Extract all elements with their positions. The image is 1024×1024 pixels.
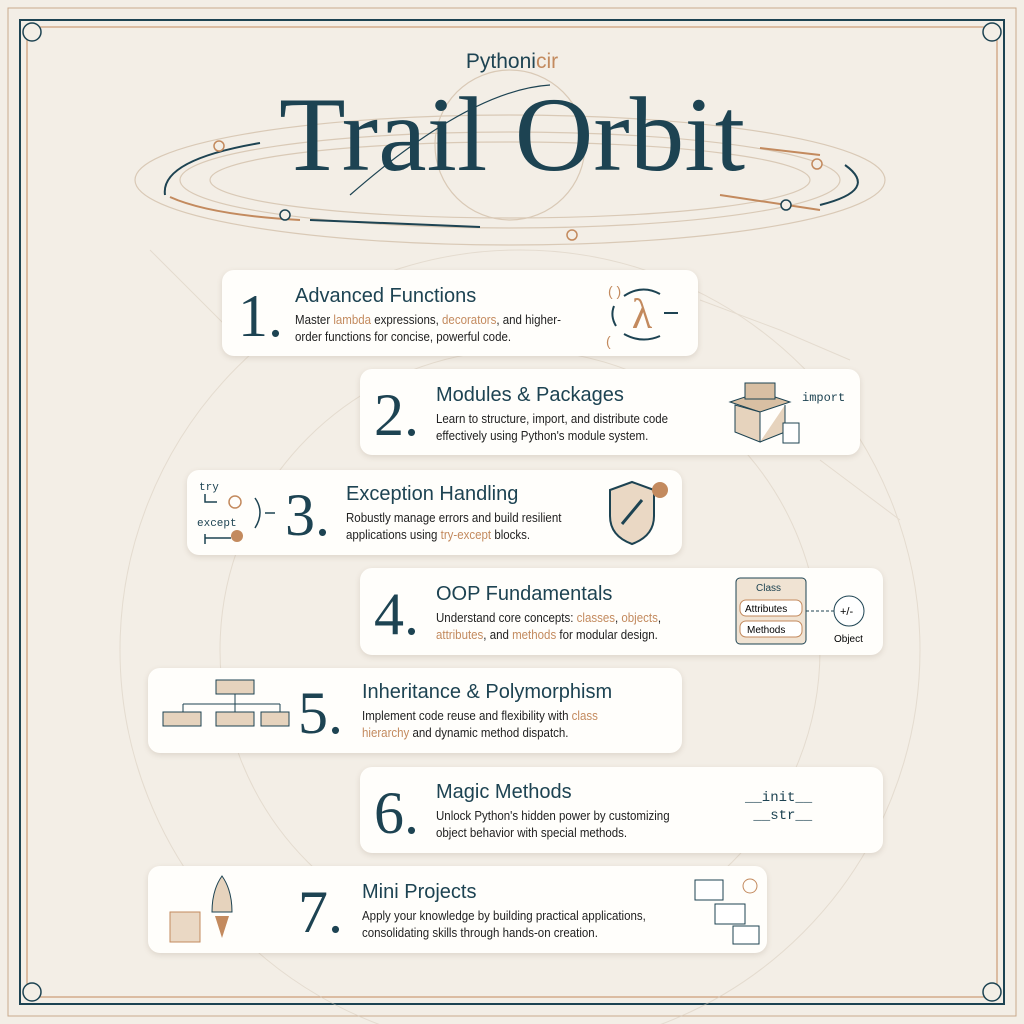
card 6: 6. (374, 780, 419, 846)
card 6: object behavior with special methods. (436, 826, 627, 840)
card 7: Apply your knowledge by building practical applications, (362, 909, 646, 923)
card 2 (360, 369, 860, 455)
card 5: Implement code reuse and flexibility with class (362, 709, 598, 723)
icon: try except: try (199, 482, 219, 494)
brand: Pythonicir (466, 50, 558, 73)
card 4: Understand core concepts: classes, objects, (436, 611, 661, 625)
icon: dunder (744, 790, 812, 824)
icon: class diagram: +/- (840, 606, 853, 618)
card 6: Unlock Python's hidden power by customizing (436, 809, 670, 823)
icon: class diagram (736, 578, 864, 645)
icon: class diagram: Attributes (745, 604, 787, 615)
icon: shield (609, 480, 668, 546)
card 3: Robustly manage errors and build resilient (346, 511, 561, 525)
icon: lambda: ( ) (608, 283, 621, 299)
card 3: Exception Handling (346, 483, 518, 505)
icon: windows (694, 878, 760, 944)
card 2: 2. (374, 382, 419, 448)
card 5: 5. (298, 680, 343, 746)
title: Trail Orbit (279, 76, 745, 193)
card 7: consolidating skills through hands-on creation. (362, 926, 598, 940)
card 7: 7. (298, 879, 343, 945)
card 2: Modules & Packages (436, 384, 624, 406)
icon: dunder: __init__ (745, 790, 812, 806)
icon: class diagram: Object (834, 634, 863, 645)
icon: try except: except (197, 518, 237, 530)
card 7 (148, 866, 767, 953)
card 2: effectively using Python's module system. (436, 429, 648, 443)
card 7: Mini Projects (362, 881, 476, 903)
card 4: 4. (374, 581, 419, 647)
card 1: Master lambda expressions, decorators, and higher- (295, 313, 561, 327)
card 1: order functions for concise, powerful code. (295, 330, 511, 344)
card 3 (187, 470, 682, 555)
icon: lambda: λ (632, 292, 653, 338)
card 4 (360, 568, 883, 655)
card 4: attributes, and methods for modular design. (436, 628, 658, 642)
icon: lambda (606, 283, 678, 349)
card 6: Magic Methods (436, 781, 572, 803)
icon: package (728, 382, 845, 444)
card 4: OOP Fundamentals (436, 583, 612, 605)
card 3: applications using try-except blocks. (346, 528, 530, 542)
icon: class diagram: Methods (747, 625, 785, 636)
icon: dunder: __str__ (753, 808, 812, 824)
card 1: Advanced Functions (295, 285, 476, 307)
header: orbit graphic (134, 69, 886, 246)
card 5 (148, 668, 682, 753)
icon: rocket (170, 875, 232, 942)
card 6 (360, 767, 883, 853)
icon: package: import (802, 391, 845, 405)
card 2: Learn to structure, import, and distribute code (436, 412, 668, 426)
card 5: Inheritance & Polymorphism (362, 681, 612, 703)
card 1 (222, 270, 698, 356)
card 1: 1. (238, 283, 283, 349)
icon: lambda: ( (606, 333, 611, 349)
icon: hierarchy (162, 680, 290, 726)
card 5: hierarchy and dynamic method dispatch. (362, 726, 568, 740)
icon: class diagram: Class (756, 583, 781, 594)
icon: try except (197, 482, 275, 544)
card 3: 3. (285, 482, 330, 548)
